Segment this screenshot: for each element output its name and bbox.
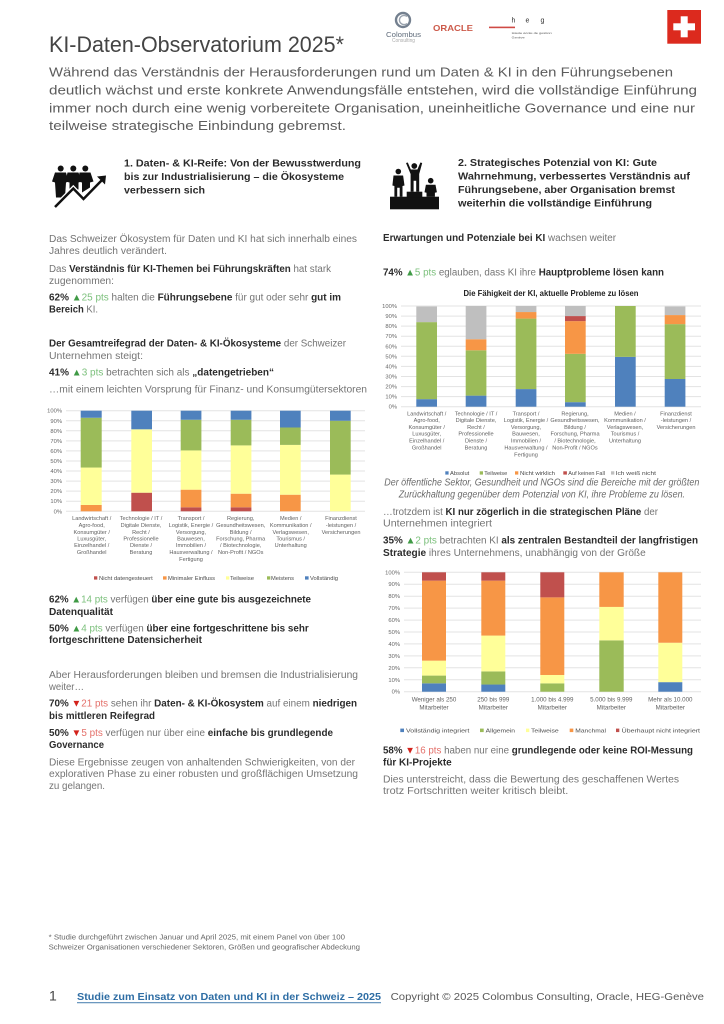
- text block: strategic integration: Unternehmen integriert: [383, 519, 492, 530]
- bar chart: ability of AI by sector: 100%: [382, 304, 397, 310]
- legend: integration chart: Teilweise: [531, 728, 559, 734]
- bar chart: data-driven maturity by sector: Tourismus /: [276, 536, 305, 542]
- text block: ROI measurement: [383, 745, 693, 797]
- bar chart: data-driven maturity by sector: -leistungen /: [326, 523, 357, 529]
- bar chart: data-driven maturity by sector: Transport /: [178, 516, 205, 522]
- text block: data quality and security: Datenqualität: [49, 607, 114, 618]
- bar chart: data-driven maturity by sector: Luxusgüter,: [77, 536, 107, 542]
- bar chart: data-driven maturity by sector: 10%: [50, 499, 62, 505]
- bar chart: ability of AI by sector: Professionelle: [458, 432, 494, 438]
- intro text: immer noch durch eine wenig vorbereitete Organisation, uneinheitliche Governance und eine nur: [49, 100, 696, 115]
- bar chart: ability of AI by sector: Fertigung: [514, 452, 538, 458]
- text block: data quality and security: 62% ▲14 pts verfügen über eine gute bis ausgezeichnete: [49, 595, 312, 606]
- bar chart: data-driven maturity by sector: 30%: [50, 479, 62, 485]
- bar chart: ability of AI by sector: Landwirtschaft /: [407, 411, 447, 417]
- bar chart: data-driven maturity by sector: Einzelhandel /: [74, 543, 110, 549]
- logos: [386, 13, 552, 44]
- bar chart: data-driven maturity by sector: 50%: [50, 459, 62, 465]
- heading: section 1: 1. Daten- & KI-Reife: Von der Bewusstwerdung: [124, 158, 361, 170]
- bar chart: ability of AI by sector: 90%: [385, 314, 397, 320]
- bar chart: data-driven maturity by sector: 40%: [50, 469, 62, 475]
- footnote: * Studie durchgeführt zwischen Januar und April 2025, mit einem Panel von über 100: [49, 935, 345, 942]
- bar chart: strategic integration by company size: 1.000 bis 4.999: [531, 697, 574, 704]
- bar chart: data-driven maturity by sector: Regierung,: [227, 516, 255, 522]
- legend: sector chart: Minimaler Einfluss: [168, 576, 215, 582]
- text block: ROI measurement: für KI-Projekte: [383, 758, 452, 769]
- bar chart: ability of AI by sector: Gesundheitswesen,: [550, 418, 600, 424]
- bar chart: ability of AI by sector: Verlagswesen,: [607, 425, 644, 431]
- bar chart: strategic integration by company size: Weniger als 250: [412, 697, 457, 704]
- chart title: ability of AI: Die Fähigkeit der KI, aktuelle Probleme zu lösen: [464, 289, 639, 298]
- bar chart: data-driven maturity by sector: 70%: [50, 439, 62, 445]
- bar chart: ability of AI by sector: Transport /: [513, 411, 540, 417]
- text block: overall maturity: [49, 339, 367, 396]
- bar chart: strategic integration by company size: Mitarbeiter: [538, 704, 567, 711]
- bar chart: ability of AI by sector: Finanzdienst: [660, 411, 692, 417]
- bar chart: ability of AI by sector: Unterhaltung: [609, 439, 641, 445]
- bar chart: data-driven maturity by sector: 90%: [50, 419, 62, 425]
- bar chart: ability of AI by sector: / Biotechnologie,: [554, 439, 596, 445]
- caption: chart interpretation: [384, 477, 700, 500]
- text block: overall maturity: …mit einem leichten Vorsprung für Finanz- und Konsumgütersektoren: [49, 385, 367, 396]
- bar chart: ability of AI by sector: Bauwesen,: [512, 432, 540, 438]
- bar chart: data-driven maturity by sector: Versorgung,: [176, 530, 207, 536]
- bar chart: data-driven maturity by sector: Immobilien /: [176, 543, 207, 549]
- footer: [49, 988, 704, 1004]
- bar chart: data-driven maturity by sector: Recht /: [132, 530, 150, 536]
- bar chart: data-driven maturity by sector: Fertigung: [179, 557, 203, 563]
- bar chart: strategic integration by company size: 5.000 bis 9.999: [590, 697, 633, 704]
- bar chart: ability of AI by sector: [382, 304, 701, 477]
- panel: right column, strategic potential of AI: [382, 158, 701, 797]
- intro text: teilweise strategische Einbindung gebremst.: [49, 118, 346, 133]
- bar chart: data-driven maturity by sector: Bauwesen,: [177, 536, 205, 542]
- logo: HEG: e: [526, 18, 530, 25]
- text block: data quality and security: 50% ▲4 pts verfügen über eine fortgeschrittene bis sehr: [49, 623, 309, 634]
- bar chart: data-driven maturity by sector: Forschung, Pharma: [216, 536, 266, 542]
- legend: integration chart: Allgemein: [486, 728, 515, 734]
- icon: podium with three figures: [390, 162, 439, 209]
- text block: remaining challenges: Aber Herausforderungen bleiben und bremsen die Industrialisierung: [49, 670, 358, 681]
- bar chart: data-driven maturity by sector: Versicherungen: [322, 530, 360, 536]
- text block: leadership understanding: Das Schweizer Ökosystem für Daten und KI hat sich innerhalb eines: [49, 234, 357, 245]
- bar chart: ability of AI by sector: Hausverwaltung /: [504, 446, 548, 452]
- text block: remaining challenges: bis mittleren Reifegrad: [49, 711, 155, 722]
- bar chart: data-driven maturity by sector: Digitale Dienste,: [121, 523, 162, 529]
- bar chart: data-driven maturity by sector: Verlagswesen,: [273, 530, 309, 536]
- bar chart: data-driven maturity by sector: Technologie / IT /: [120, 516, 163, 522]
- bar chart: strategic integration by company size: 70%: [388, 606, 400, 612]
- bar chart: ability of AI by sector: 0%: [389, 405, 397, 411]
- caption: chart interpretation: Zurückhaltung gegenüber dem Potenzial von KI, ihre Probleme zu lösen.: [398, 489, 685, 500]
- legend: sector chart: Nicht datengesteuert: [99, 576, 153, 582]
- bar chart: ability of AI by sector: Regierung,: [561, 411, 589, 417]
- intro text: deutlich wächst und erste konkrete Anwendungsfälle entstehen, wird die vollständige Einführung: [49, 82, 697, 98]
- bar chart: strategic integration by company size: 40%: [388, 642, 400, 648]
- logo: HEG: g: [540, 18, 544, 25]
- heading: section 2: [457, 158, 691, 210]
- bar chart: strategic integration by company size: 0%: [392, 690, 400, 696]
- bar chart: strategic integration by company size: 30%: [388, 654, 400, 660]
- legend: ability chart: Auf keinen Fall: [568, 471, 605, 477]
- bar chart: strategic integration by company size: 60%: [388, 618, 400, 624]
- bar chart: ability of AI by sector: Medien /: [614, 411, 636, 417]
- bar chart: ability of AI by sector: Logistik, Energie /: [504, 418, 549, 424]
- bar chart: data-driven maturity by sector: / Biotechnologie,: [220, 543, 262, 549]
- text block: leadership understanding: zugenommen:: [49, 276, 114, 287]
- bar chart: ability of AI by sector: 40%: [385, 364, 397, 370]
- intro text: [49, 64, 697, 133]
- heading: section 1: verbessern sich: [124, 185, 205, 196]
- bar chart: ability of AI by sector: Großhandel: [412, 446, 441, 452]
- bar chart: ability of AI by sector: 10%: [385, 395, 397, 401]
- bar chart: strategic integration by company size: 20%: [388, 666, 400, 672]
- bar chart: data-driven maturity by sector: Professionelle: [123, 536, 159, 542]
- text block: expectations: Erwartungen und Potenziale bei KI wachsen weiter: [383, 233, 617, 244]
- logo: HEG: [489, 18, 552, 40]
- bar chart: ability of AI by sector: Beratung: [465, 446, 487, 452]
- text block: remaining challenges: 70% ▼21 pts sehen ihr Daten- & KI-Ökosystem auf einem niedrigen: [49, 699, 357, 710]
- text block: remaining challenges: 50% ▼5 pts verfügen nur über eine einfache bis grundlegende: [49, 728, 334, 739]
- bar chart: ability of AI by sector: Bildung /: [564, 425, 586, 431]
- text block: remaining challenges: Governance: [49, 740, 105, 751]
- heading: section 1: bis zur Industrialisierung – die Ökosysteme: [124, 170, 344, 183]
- bar chart: ability of AI by sector: 60%: [385, 344, 397, 350]
- bar chart: ability of AI by sector: Tourismus /: [611, 432, 640, 438]
- legend: sector chart: Meistens: [271, 576, 294, 582]
- bar chart: ability of AI by sector: Digitale Dienste,: [456, 418, 497, 424]
- text block: strategic integration: …trotzdem ist KI nur zögerlich in die strategischen Pläne der: [383, 507, 659, 518]
- legend: integration chart: [400, 727, 700, 734]
- footnote: [49, 935, 360, 951]
- legend: ability chart: Ich weiß nicht: [616, 471, 656, 477]
- bar chart: ability of AI by sector: 50%: [385, 354, 397, 360]
- bar chart: data-driven maturity by sector: Unterhaltung: [275, 543, 307, 549]
- legend: ability chart: Nicht wirklich: [520, 471, 555, 477]
- icon: people with rising arrow: [52, 166, 106, 207]
- bar chart: strategic integration by company size: Mitarbeiter: [656, 704, 685, 711]
- text block: overall maturity: 41% ▲3 pts betrachten sich als „datengetrieben“: [49, 368, 274, 379]
- bar chart: data-driven maturity by sector: Kommunikation /: [270, 523, 312, 529]
- text block: data quality and security: [49, 595, 312, 646]
- bar chart: ability of AI by sector: Technologie / IT /: [455, 411, 498, 417]
- bar chart: ability of AI by sector: Forschung, Pharma: [550, 432, 600, 438]
- bar chart: strategic integration by company size: 10%: [388, 678, 400, 684]
- bar chart: strategic integration by company size: 50%: [388, 630, 400, 636]
- bar chart: ability of AI by sector: Einzelhandel /: [409, 439, 445, 445]
- bar chart: data-driven maturity by sector: Logistik, Energie /: [169, 523, 214, 529]
- panel: left column, data and AI maturity: [47, 158, 367, 792]
- logo: Colombus Consulting: [386, 13, 421, 44]
- bar chart: ability of AI by sector: Luxusgüter,: [412, 432, 442, 438]
- text block: strategic integration: Strategie ihres Unternehmens, unabhängig von der Größe: [383, 548, 646, 559]
- bar chart: ability of AI by sector: Versorgung,: [511, 425, 542, 431]
- bar chart: ability of AI by sector: 80%: [385, 324, 397, 330]
- text block: data quality and security: fortgeschrittene Datensicherheit: [49, 635, 203, 646]
- text block: remaining challenges: weiter…: [48, 682, 84, 693]
- text block: ROI measurement: 58% ▼16 pts haben nur eine grundlegende oder keine ROI-Messung: [383, 745, 693, 756]
- bar chart: data-driven maturity by sector: Agro-food,: [79, 523, 105, 529]
- text block: leadership understanding: Jahres deutlich verändert.: [49, 246, 167, 257]
- bar chart: ability of AI by sector: Versicherungen: [657, 425, 695, 431]
- bar chart: data-driven maturity by sector: Medien /: [280, 516, 302, 522]
- text block: expectations: 74% ▲5 pts eglauben, dass KI ihre Hauptprobleme lösen kann: [383, 268, 664, 279]
- text block: remaining challenges: Diese Ergebnisse zeugen von anhaltenden Schwierigkeiten, von der: [49, 757, 356, 768]
- logo: Colombus Consulting: Consulting: [392, 38, 415, 44]
- text block: overall maturity: Der Gesamtreifegrad der Daten- & KI-Ökosysteme der Schweizer: [49, 339, 347, 350]
- bar chart: ability of AI by sector: Recht /: [467, 425, 485, 431]
- legend: integration chart: Vollständig integriert: [406, 728, 470, 734]
- bar chart: ability of AI by sector: Kommunikation /: [604, 418, 646, 424]
- bar chart: ability of AI by sector: 30%: [385, 374, 397, 380]
- footer study link: Studie zum Einsatz von Daten und KI in der Schweiz – 2025: [77, 991, 381, 1003]
- bar chart: data-driven maturity by sector: 0%: [54, 509, 62, 515]
- logo: HEG: h: [512, 18, 516, 25]
- bar chart: ability of AI by sector: -leistungen /: [661, 418, 692, 424]
- bar chart: strategic integration by company size: Mehr als 10.000: [648, 697, 693, 704]
- heading: section 2: 2. Strategisches Potenzial von KI: Gute: [458, 158, 657, 169]
- legend: sector chart: [94, 576, 338, 582]
- logo: Oracle: ORACLE: [433, 23, 473, 33]
- bar chart: data-driven maturity by sector: 60%: [50, 449, 62, 455]
- legend: integration chart: Überhaupt nicht integriert: [622, 727, 700, 734]
- heading: section 2: weiterhin die vollständige Einführung: [457, 199, 652, 210]
- bar chart: data-driven maturity by sector: Finanzdienst: [325, 516, 357, 522]
- bar chart: ability of AI by sector: Dienste /: [465, 439, 487, 445]
- bar chart: strategic integration by company size: 90%: [388, 582, 400, 588]
- text block: expectations: [383, 233, 664, 279]
- page number: 1: [49, 988, 57, 1004]
- bar chart: data-driven maturity by sector: Non-Profit / NGOs: [218, 550, 264, 556]
- bar chart: strategic integration by company size: Mitarbeiter: [419, 704, 449, 711]
- bar chart: data-driven maturity by sector: 20%: [50, 489, 62, 495]
- legend: ability chart: [445, 471, 656, 477]
- text block: remaining challenges: explorativen Phase zu einer robusten und großflächigen Umsetzung: [49, 769, 358, 780]
- footnote: Schweizer Organisationen verschiedener Sektoren, Größen und geografischer Abdeckung: [49, 944, 360, 951]
- bar chart: data-driven maturity by sector: Großhandel: [77, 550, 106, 556]
- heading: section 2: Wahrnehmung, verbessertes Verständnis auf: [458, 172, 691, 182]
- bar chart: strategic integration by company size: Mitarbeiter: [479, 704, 508, 711]
- logo: HEG: Haute école de gestion: [512, 31, 552, 35]
- bar chart: ability of AI by sector: Agro-food,: [414, 418, 440, 424]
- legend: ability chart: Absolut: [450, 471, 470, 477]
- bar chart: strategic integration by company size: 250 bis 999: [477, 697, 510, 704]
- bar chart: strategic integration by company size: 80%: [388, 594, 400, 600]
- bar chart: data-driven maturity by sector: 80%: [50, 429, 62, 435]
- bar chart: ability of AI by sector: Immobilien /: [511, 439, 542, 445]
- text block: leadership understanding: [49, 234, 357, 316]
- text block: leadership understanding: Bereich KI.: [49, 305, 98, 316]
- bar chart: strategic integration by company size: Mitarbeiter: [597, 704, 626, 711]
- text block: leadership understanding: 62% ▲25 pts halten die Führungsebene für gut oder sehr gut im: [49, 293, 341, 304]
- icon: Swiss flag: [667, 10, 701, 44]
- logo: HEG: Genève: [512, 36, 525, 40]
- bar chart: strategic integration by company size: 100%: [385, 570, 400, 576]
- bar chart: ability of AI by sector: 20%: [385, 385, 397, 391]
- text block: leadership understanding: Das Verständnis für KI-Themen bei Führungskräften hat stark: [49, 264, 331, 275]
- bar chart: data-driven maturity by sector: Gesundheitswesen,: [216, 523, 266, 529]
- bar chart: data-driven maturity by sector: Konsumgüter /: [74, 530, 110, 536]
- text block: remaining challenges: zu gelangen.: [49, 781, 105, 792]
- logo: Colombus Consulting: Colombus: [386, 30, 421, 39]
- text block: remaining challenges: [48, 670, 358, 792]
- text block: strategic integration: 35% ▲2 pts betrachten KI als zentralen Bestandteil der langfristigen: [383, 536, 698, 547]
- bar chart: ability of AI by sector: Non-Profit / NGOs: [552, 446, 598, 452]
- bar chart: data-driven maturity by sector: 100%: [47, 409, 62, 415]
- intro text: Während das Verständnis der Herausforderungen rund um Daten & KI in den Führungsebenen: [49, 64, 673, 80]
- text block: ROI measurement: Dies unterstreicht, dass die Bewertung des geschaffenen Wertes: [383, 774, 679, 785]
- copyright: Copyright © 2025 Colombus Consulting, Oracle, HEG-Genève: [391, 991, 704, 1003]
- legend: sector chart: Teilweise: [230, 576, 254, 582]
- legend: ability chart: Teilweise: [484, 471, 507, 477]
- legend: integration chart: Manchmal: [575, 728, 606, 734]
- bar chart: data-driven maturity by sector: Landwirtschaft /: [72, 516, 112, 522]
- bar chart: data-driven maturity by sector: Beratung: [130, 550, 152, 556]
- legend: sector chart: Vollständig: [310, 576, 338, 582]
- text block: overall maturity: Unternehmen steigt:: [49, 351, 143, 362]
- bar chart: strategic integration by company size: [385, 570, 701, 734]
- heading: section 2: Führungsebene, aber Organisation bremst: [458, 185, 676, 196]
- bar chart: data-driven maturity by sector: Dienste /: [130, 543, 152, 549]
- text block: ROI measurement: trotz Fortschritten weiter kritisch bleibt.: [383, 786, 568, 797]
- bar chart: data-driven maturity by sector: Hausverwaltung /: [169, 550, 213, 556]
- text block: strategic integration: [383, 507, 698, 559]
- title: KI-Daten-Observatorium 2025*: [49, 32, 344, 57]
- bar chart: ability of AI by sector: Konsumgüter /: [409, 425, 445, 431]
- bar chart: data-driven maturity by sector: [47, 409, 365, 582]
- heading: section 1: [124, 158, 361, 196]
- bar chart: data-driven maturity by sector: Bildung /: [230, 530, 252, 536]
- bar chart: ability of AI by sector: 70%: [385, 334, 397, 340]
